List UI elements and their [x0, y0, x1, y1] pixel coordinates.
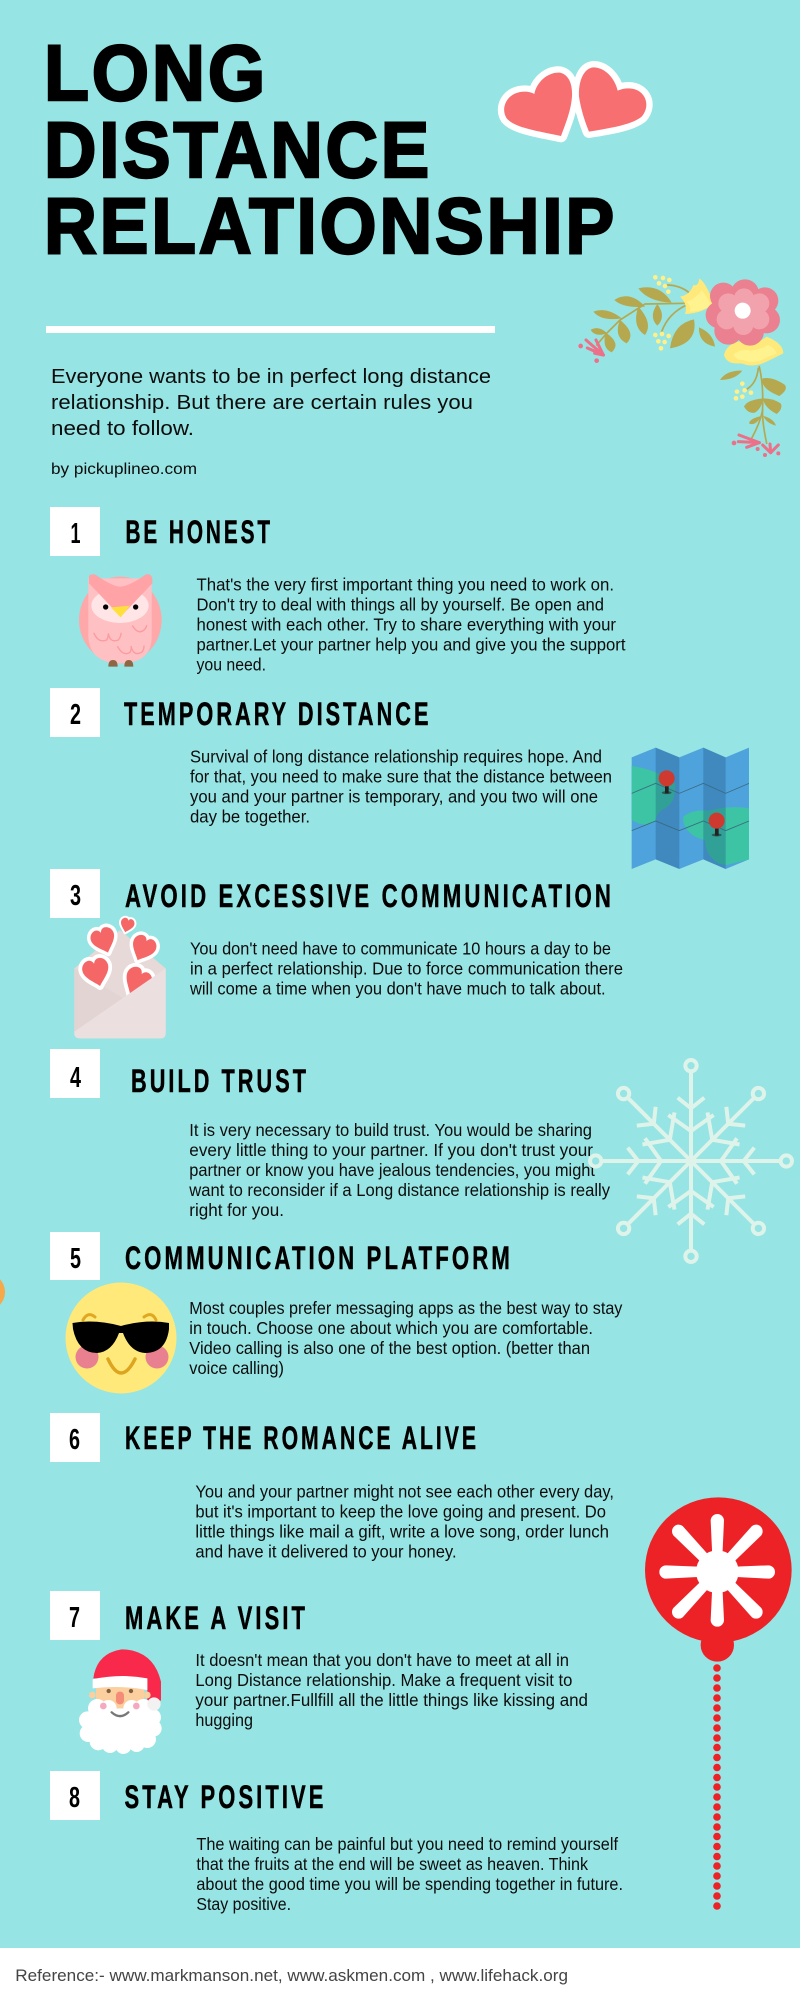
icon: snowflake [590, 1060, 792, 1262]
number box 8: 8 [69, 1782, 80, 1814]
body text 8: Stay positive. [196, 1894, 291, 1914]
intro text: relationship. But there are certain rules you [51, 391, 473, 414]
body text 7 [195, 1650, 588, 1730]
dotted balloon string [713, 1664, 721, 1910]
intro text: Everyone wants to be in perfect long distance [51, 365, 491, 388]
body text 1 [196, 575, 626, 675]
body text 1: That's the very first important thing you need to work on. [196, 575, 614, 595]
body text 4: It is very necessary to build trust. You would be sharing [189, 1120, 592, 1140]
heading 7: MAKE A VISIT [125, 1600, 308, 1636]
body text 3: will come a time when you don't have much to talk about. [189, 979, 606, 999]
number box 4: 4 [70, 1062, 81, 1094]
number box 1 [50, 507, 100, 556]
body text 2: you and your partner is temporary, and you two will one [190, 787, 598, 807]
icon: sunglasses emoji [66, 1282, 176, 1394]
number box 7: 7 [69, 1602, 80, 1634]
number box 8 [50, 1771, 100, 1820]
icon: red balloon ornament [645, 1497, 792, 1662]
body text 1: you need. [196, 655, 266, 675]
number box 3 [50, 869, 100, 918]
title [44, 28, 617, 270]
title: RELATIONSHIP [44, 181, 617, 270]
body text 3 [189, 939, 623, 999]
number box 4 [50, 1049, 100, 1098]
number box 3: 3 [70, 880, 81, 912]
number box 5 [50, 1232, 100, 1280]
divider [46, 326, 495, 333]
body text 1: partner.Let your partner help you and give you the support [196, 635, 626, 655]
intro text: need to follow. [51, 417, 194, 440]
footer band [0, 1948, 800, 2000]
panel: step 3 avoid excessive communication [50, 869, 623, 1038]
body text 4: want to reconsider if a Long distance relationship is really [188, 1180, 610, 1200]
heading 4: BUILD TRUST [131, 1063, 309, 1099]
body text 8: The waiting can be painful but you need to remind yourself [196, 1834, 618, 1854]
title: DISTANCE [44, 105, 432, 194]
body text 4 [188, 1120, 610, 1220]
body text 7: your partner.Fullfill all the little things like kissing and [195, 1690, 588, 1710]
title: LONG [44, 28, 268, 117]
body text 8: about the good time you will be spending together in future. [196, 1874, 623, 1894]
number box 1: 1 [70, 518, 80, 550]
byline: by pickuplineo.com [51, 461, 197, 478]
body text 3: in a perfect relationship. Due to force communication there [190, 959, 623, 979]
body text 6: and have it delivered to your honey. [195, 1541, 457, 1561]
heading 8: STAY POSITIVE [124, 1779, 326, 1815]
body text 7: It doesn't mean that you don't have to meet at all in [195, 1650, 569, 1670]
panel: step 6 keep the romance alive [50, 1413, 614, 1561]
body text 6 [195, 1481, 614, 1561]
body text 2: for that, you need to make sure that the distance between [190, 767, 612, 787]
heading 6: KEEP THE ROMANCE ALIVE [125, 1420, 479, 1456]
body text 6: but it's important to keep the love going and present. Do [195, 1501, 606, 1521]
body text 1: Don't try to deal with things all by yourself. Be open and [196, 595, 604, 615]
number box 6 [50, 1413, 100, 1462]
body text 4: partner or know you have jealous tendencies, you might [189, 1160, 595, 1180]
body text 5: Video calling is also one of the best option. (better than [189, 1338, 590, 1358]
body text 6: little things like mail a gift, write a love song, order lunch [195, 1521, 609, 1541]
body text 8 [196, 1834, 623, 1914]
body text 5: in touch. Choose one about which you are comfortable. [189, 1318, 593, 1338]
body text 5: Most couples prefer messaging apps as the best way to stay [189, 1298, 623, 1318]
body text 7: Long Distance relationship. Make a frequent visit to [195, 1670, 572, 1690]
intro text [51, 365, 491, 440]
icon: love letter envelope [74, 917, 166, 1038]
number box 5: 5 [70, 1243, 81, 1275]
heading 5: COMMUNICATION PLATFORM [125, 1240, 513, 1276]
panel: step 8 stay positive [50, 1771, 623, 1914]
body text 2: day be together. [190, 807, 310, 827]
body text 4: every little thing to your partner. If you don't trust your [189, 1140, 593, 1160]
number box 6: 6 [69, 1424, 80, 1456]
body text 4: right for you. [189, 1200, 284, 1220]
icon: orange edge shape [0, 1270, 5, 1314]
body text 1: honest with each other. Try to share everything with your [196, 615, 616, 635]
reference text: Reference:- www.markmanson.net, www.askmen.com , www.lifehack.org [15, 1967, 568, 1985]
body text 8: that the fruits at the end will be sweet as heaven. Think [196, 1854, 588, 1874]
number box 2 [50, 688, 100, 737]
panel: step 4 build trust [50, 1049, 792, 1262]
panel: step 1 be honest [50, 507, 626, 675]
panel: step 2 temporary distance [50, 688, 749, 869]
icon: folded map [632, 748, 749, 869]
panel: step 5 communication platform [0, 1232, 623, 1394]
body text 7: hugging [195, 1710, 253, 1730]
number box 2: 2 [70, 699, 81, 731]
body text 3: You don't need have to communicate 10 hours a day to be [190, 939, 611, 959]
body text 2: Survival of long distance relationship requires hope. And [190, 747, 602, 767]
icon: floral corner [578, 275, 786, 457]
number box 7 [50, 1591, 100, 1640]
body text 5 [189, 1298, 623, 1378]
panel: step 7 make a visit [50, 1591, 588, 1754]
body text 5: voice calling) [189, 1358, 284, 1378]
icon: owl [79, 574, 162, 667]
heading 1: BE HONEST [126, 514, 273, 550]
icon: santa [79, 1649, 162, 1754]
body text 2 [190, 747, 612, 827]
icon: two hearts [504, 67, 646, 136]
body text 6: You and your partner might not see each other every day, [195, 1481, 614, 1501]
heading 2: TEMPORARY DISTANCE [124, 696, 432, 732]
